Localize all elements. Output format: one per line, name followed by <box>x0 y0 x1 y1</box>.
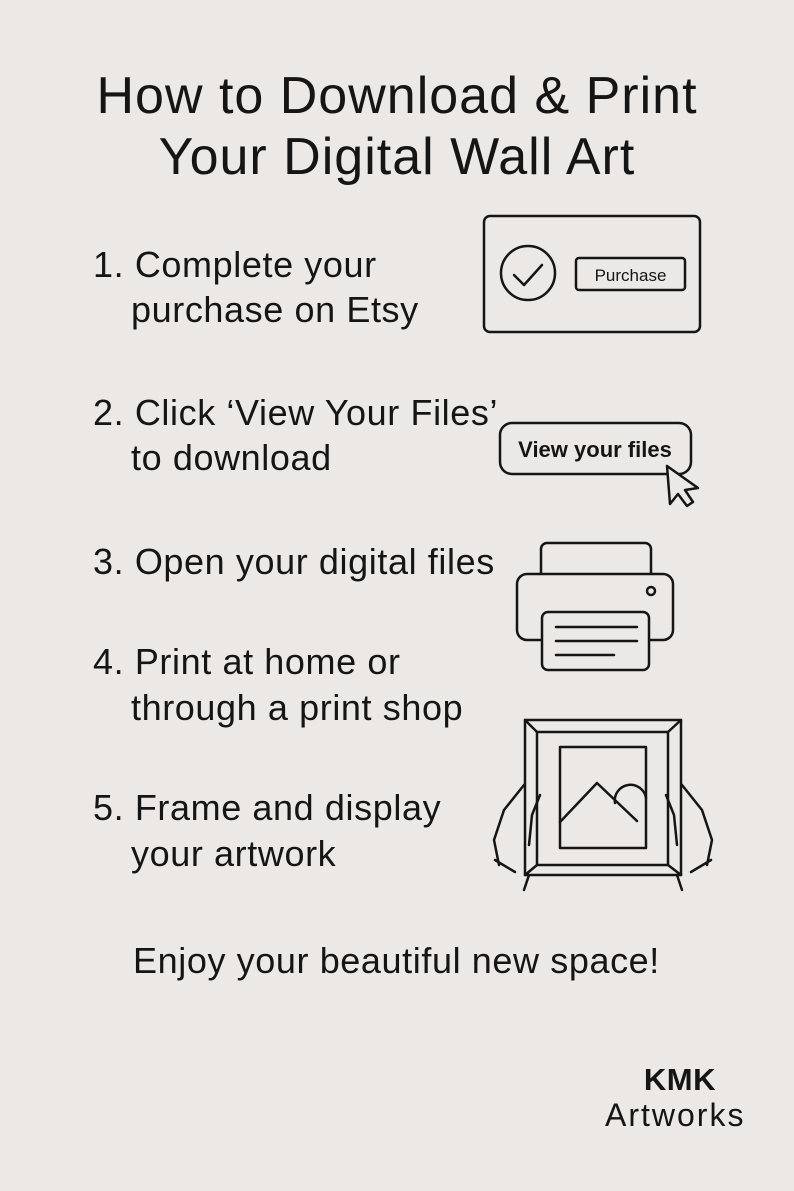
closing message: Enjoy your beautiful new space! <box>133 940 660 981</box>
step 4 text <box>93 641 463 728</box>
brand: KMK <box>644 1062 716 1097</box>
step 1 text <box>93 244 419 330</box>
brand sub: Artworks <box>605 1097 745 1133</box>
step 1 text: 1. Complete your <box>93 244 377 285</box>
step 5 text: your artwork <box>131 833 336 874</box>
step 4 text: through a print shop <box>131 687 463 728</box>
title: How to Download & Print <box>96 67 698 125</box>
icon: hands holding frame <box>494 720 712 890</box>
icon: printer <box>517 543 673 670</box>
step 2 text: to download <box>131 437 332 478</box>
icon: purchase window <box>484 216 700 332</box>
step 2 text: 2. Click ‘View Your Files’ <box>93 392 498 433</box>
title <box>96 67 698 186</box>
step 5 text <box>93 787 441 874</box>
step 5 text: 5. Frame and display <box>93 787 441 828</box>
icon: view files button with cursor <box>500 423 698 506</box>
step 4 text: 4. Print at home or <box>93 641 401 682</box>
step 2 text <box>93 392 498 478</box>
step 3 text: 3. Open your digital files <box>93 541 495 582</box>
step 1 text: purchase on Etsy <box>131 289 419 330</box>
icon: view files button with cursor: View your files <box>518 437 672 462</box>
icon: purchase window: Purchase <box>595 266 666 285</box>
title: Your Digital Wall Art <box>159 128 635 186</box>
